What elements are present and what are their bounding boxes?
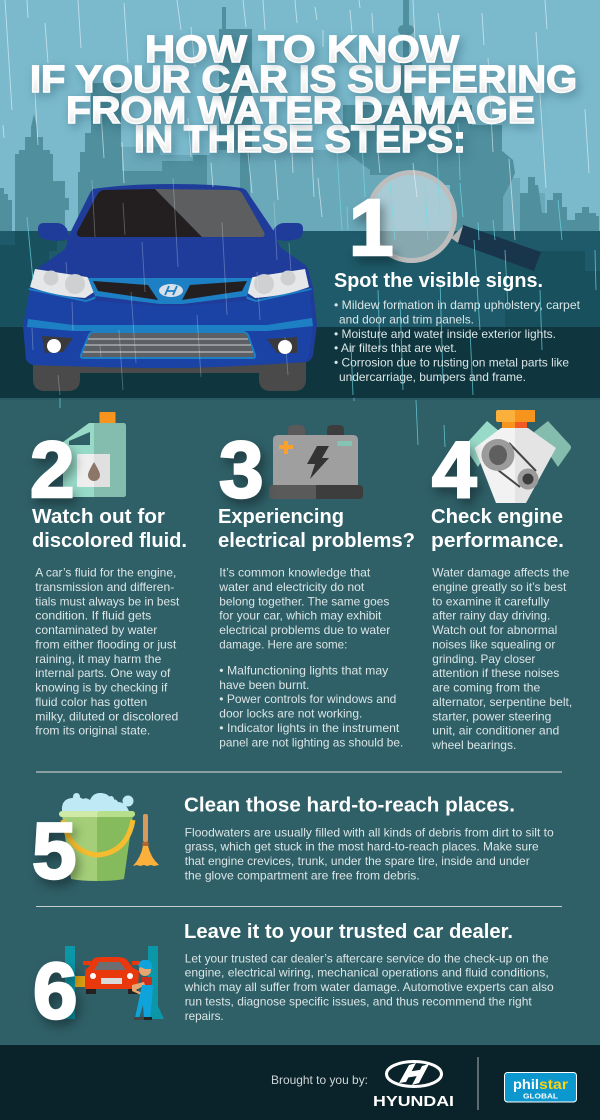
- text: step 3 body: It’s common knowledge that: [219, 566, 371, 580]
- text: step 4 body: engine greatly so it’s best: [432, 580, 567, 594]
- logo: Philstar Global: star: [539, 1076, 569, 1092]
- text: step 4 body: Water damage affects the: [432, 566, 570, 580]
- number 4: 4: [432, 425, 477, 514]
- number 6: 6: [33, 946, 78, 1035]
- text: step 6 body: Let your trusted car dealer’s aftercare service do the check-up on the: [185, 951, 549, 965]
- text: step 4 body: attention if these noises: [432, 666, 559, 680]
- text: step 3 body: electrical problems due to water: [219, 623, 390, 637]
- text: step 3 body: water and electricity do not: [218, 580, 365, 594]
- text: step 4 body: noises like squealing or: [432, 637, 555, 651]
- heading: watch out for discolored fluid: [32, 506, 187, 552]
- list: visible signs: • Corrosion due to rusting on metal parts like: [334, 356, 569, 370]
- logo: Philstar Global: [504, 1072, 576, 1102]
- number 1: 1: [349, 183, 394, 272]
- panel: step 6 trusted car dealer: [33, 921, 554, 1035]
- wheels: [33, 355, 306, 391]
- text: step 6 body: [184, 951, 554, 1023]
- text: step 4 body: starter, power steering: [432, 709, 551, 723]
- text: step 3 body: damage. Here are some:: [219, 637, 347, 651]
- heading: experiencing electrical problems: [218, 506, 415, 552]
- heading: watch out for discolored fluid: Watch out for: [32, 506, 165, 528]
- panel: step 4 engine performance: [431, 410, 572, 752]
- text: step 3 body: • Indicator lights in the instrument: [219, 721, 400, 735]
- rain streaks: [3, 0, 596, 447]
- text: step 5 body: grass, which get stuck in the most hard-to-reach places. Make sure: [185, 840, 539, 854]
- text: step 5 body: the glove compartment are free from debris.: [185, 868, 420, 882]
- upper grille: [88, 278, 252, 304]
- text: step 3 body: • Power controls for windows and: [219, 692, 396, 706]
- text: step 3 body: door locks are not working.: [219, 707, 362, 721]
- list: visible signs: undercarriage, bumpers and frame.: [339, 370, 526, 384]
- text: step 6 body: engine, electrical wiring, mechanical operations and fluid conditions,: [185, 966, 549, 980]
- text: step 2 body: contaminated by water: [35, 623, 157, 637]
- skyline front layer: [0, 0, 599, 231]
- text: step 3 body: panel are not lighting as should be.: [219, 735, 403, 749]
- logo: Philstar Global: phil: [513, 1076, 539, 1092]
- heading: check engine performance: performance.: [431, 530, 564, 552]
- heading: clean hard-to-reach places: Clean those hard-to-reach places.: [184, 795, 515, 817]
- heading: leave it to your trusted car dealer: Leave it to your trusted car dealer.: [184, 921, 513, 943]
- title: IF YOUR CAR IS SUFFERING: [30, 59, 577, 101]
- icon: car battery: [269, 425, 363, 499]
- icon: mechanic and car lift: [65, 946, 164, 1020]
- text: step 5 body: Floodwaters are usually filled with all kinds of debris from dirt to silt to: [185, 825, 554, 839]
- blue trim band: [27, 318, 313, 331]
- heading: experiencing electrical problems: electrical problems?: [218, 530, 415, 552]
- logo: Hyundai: HYUNDAI: [373, 1093, 454, 1110]
- text: step 2 body: from its original state.: [35, 724, 150, 738]
- logo: Hyundai: [373, 1062, 454, 1110]
- text: step 3 body: [218, 566, 403, 749]
- text: step 5 body: that engine crevices, trunk, under the spare tire, inside and under: [185, 854, 530, 868]
- Hyundai emblem: [159, 284, 183, 297]
- text: step 6 body: repairs.: [185, 1009, 224, 1023]
- icon: fluid jug: [63, 412, 126, 497]
- text: step 4 body: [431, 566, 572, 752]
- icon: bucket and broom: [59, 793, 159, 881]
- lower grille: [81, 332, 255, 358]
- title: IN THESE STEPS:: [134, 119, 466, 161]
- heading: check engine performance: [431, 506, 564, 552]
- text: step 2 body: tials must always be in best: [35, 594, 180, 608]
- heading: watch out for discolored fluid: discolored fluid.: [32, 530, 187, 552]
- text: step 2 body: from either flooding or just: [35, 637, 177, 651]
- car body: [27, 184, 317, 368]
- panel: step 2 discolored fluid: [30, 412, 187, 738]
- text: brought to you by: Brought to you by:: [271, 1073, 368, 1087]
- list: visible signs: • Air filters that are wet.: [334, 341, 457, 355]
- illustration: blue Hyundai car front view: [23, 184, 317, 391]
- title: HOW TO KNOW: [145, 29, 459, 71]
- panel: step 5 clean hard-to-reach places: [32, 793, 554, 895]
- list: visible signs: • Moisture and water inside exterior lights.: [334, 327, 556, 341]
- text: step 6 body: which may all suffer from water damage. Automotive experts can also: [184, 980, 554, 994]
- headlights: [28, 288, 96, 302]
- heading: check engine performance: Check engine: [431, 506, 563, 528]
- panel: footer sponsors: [0, 1045, 600, 1120]
- text: step 4 body: Watch out for abnormal: [432, 623, 557, 637]
- icon: engine: [465, 410, 571, 503]
- text: step 2 body: fluid color has gotten: [35, 695, 147, 709]
- text: step 4 body: to examine it carefully: [432, 594, 549, 608]
- number 5: 5: [32, 806, 76, 895]
- logo: Philstar Global: GLOBAL: [523, 1092, 558, 1100]
- text: step 2 body: knowing is by checking if: [35, 680, 168, 694]
- icon: magnifying glass: [365, 170, 541, 271]
- text: step 5 body: [185, 825, 554, 882]
- text: step 4 body: alternator, serpentine belt,: [432, 695, 572, 709]
- text: step 4 body: wheel bearings.: [431, 738, 516, 752]
- text: step 3 body: • Malfunctioning lights that may: [219, 664, 388, 678]
- list: visible signs: and door and trim panels.: [339, 312, 474, 326]
- text: step 6 body: run tests, diagnose specific issues, and thus recommend the right: [185, 994, 532, 1008]
- fog lights: [42, 336, 73, 353]
- text: step 2 body: A car’s fluid for the engine,: [35, 566, 176, 580]
- text: step 2 body: [35, 566, 180, 738]
- text: step 4 body: grinding. Pay closer: [432, 652, 535, 666]
- text: step 3 body: have been burnt.: [219, 678, 309, 692]
- text: step 2 body: condition. If fluid gets: [35, 609, 151, 623]
- panel: step 1 text: [334, 270, 581, 384]
- title: [30, 29, 577, 161]
- text: step 4 body: after rainy day driving.: [432, 609, 550, 623]
- text: step 3 body: belong together. The same goes: [219, 594, 389, 608]
- skyline back layer: [122, 140, 545, 231]
- number 2: 2: [30, 425, 74, 514]
- text: step 2 body: raining, it may harm the: [35, 652, 162, 666]
- number 3: 3: [219, 425, 264, 514]
- panel: step 3 electrical problems: [218, 425, 415, 749]
- text: step 2 body: milky, diluted or discolored: [35, 709, 178, 723]
- text: step 4 body: are coming from the: [432, 680, 541, 694]
- windshield: [77, 189, 202, 237]
- text: step 2 body: internal parts. One way of: [35, 666, 171, 680]
- mirrors: [38, 223, 303, 241]
- text: step 2 body: transmission and differen-: [35, 580, 174, 594]
- list: visible signs: • Mildew formation in damp upholstery, carpet: [334, 298, 581, 312]
- heading: experiencing electrical problems: Experiencing: [218, 506, 344, 528]
- text: step 4 body: unit, air conditioner and: [432, 724, 559, 738]
- heading: spot the visible signs: Spot the visible signs.: [334, 270, 543, 292]
- text: step 3 body: for your car, which may exhibit: [219, 609, 382, 623]
- title: FROM WATER DAMAGE: [66, 90, 535, 132]
- list: visible signs: [334, 298, 581, 384]
